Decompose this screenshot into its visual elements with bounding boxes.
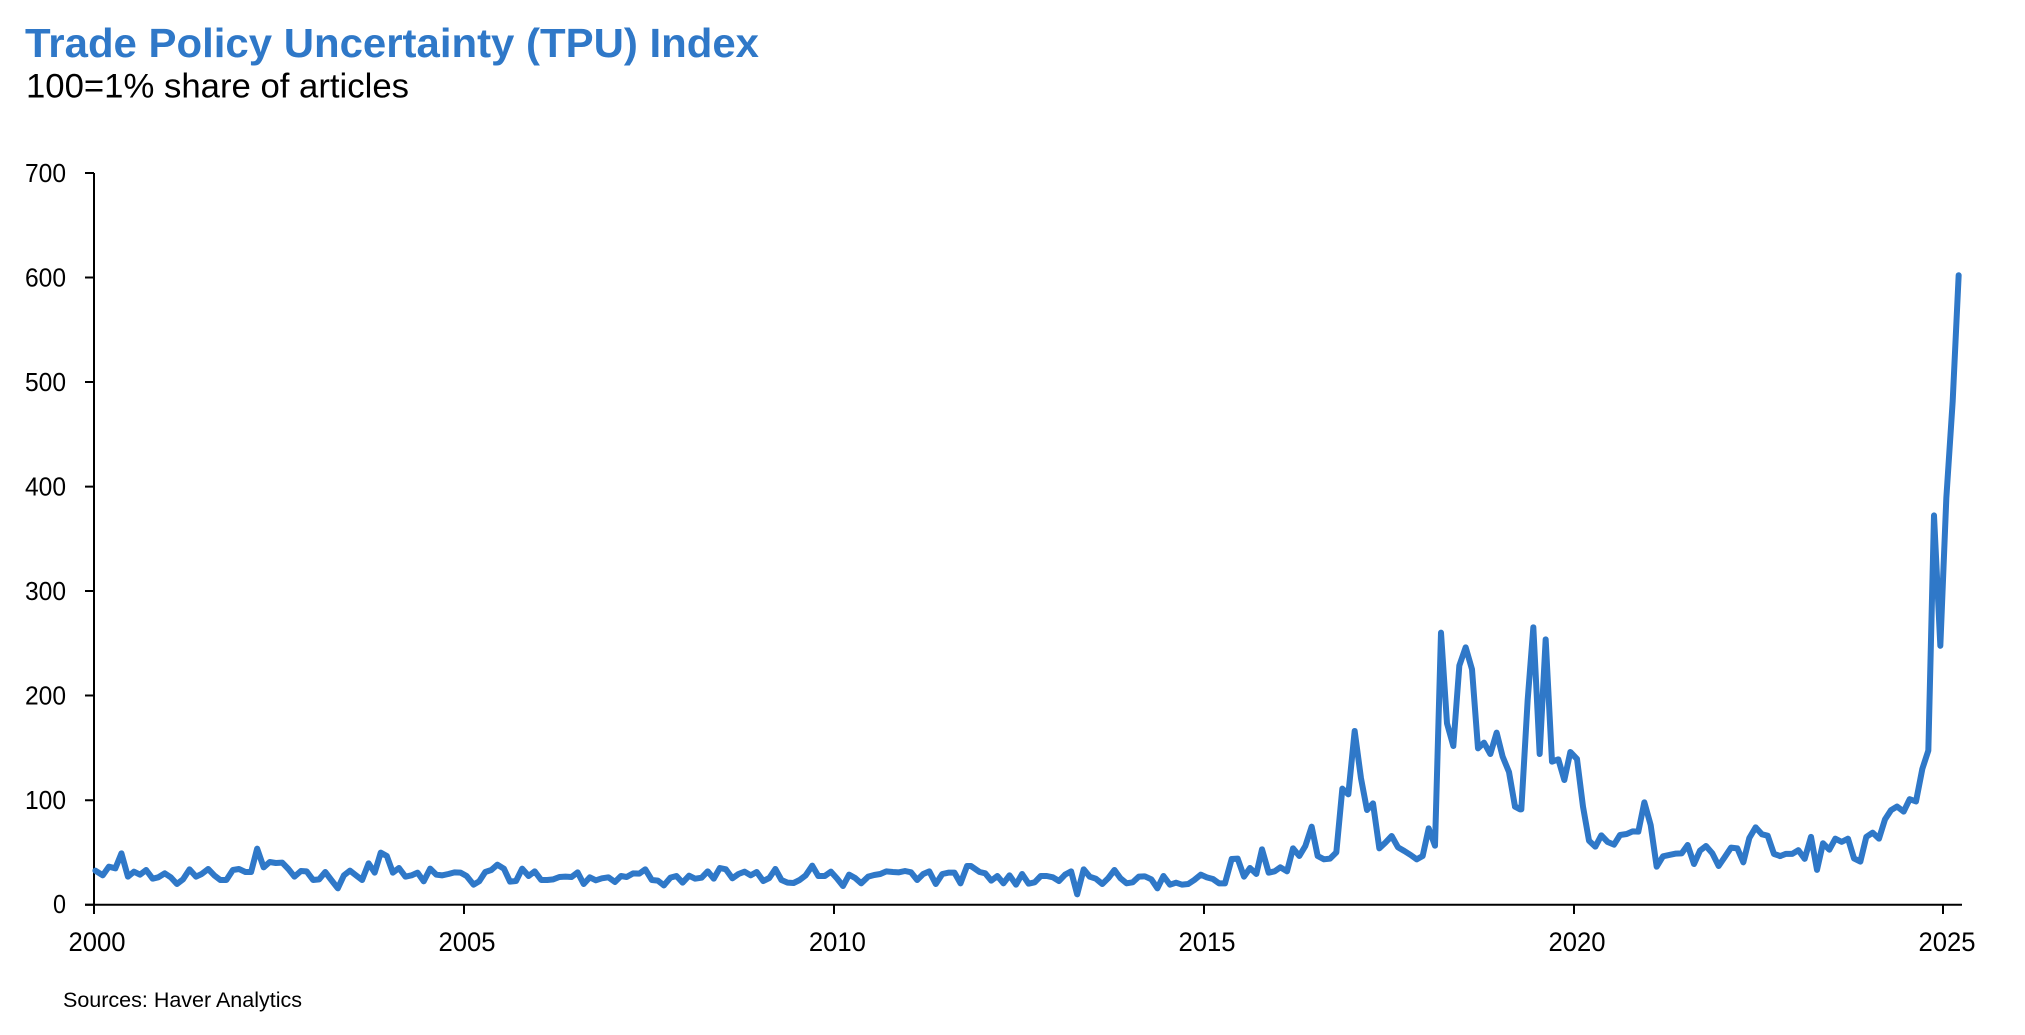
title: Trade Policy Uncertainty (TPU) Index <box>25 20 759 66</box>
y axis labels: 500 <box>25 367 66 397</box>
y axis labels: 100 <box>25 785 66 815</box>
x axis <box>68 905 1976 957</box>
y axis <box>25 158 94 919</box>
line chart: TPU index series <box>95 275 1959 894</box>
y axis labels <box>25 158 66 919</box>
y axis labels: 600 <box>25 262 66 292</box>
y axis labels: 700 <box>25 158 66 188</box>
y axis labels: 0 <box>53 889 66 919</box>
subtitle: 100=1% share of articles <box>26 68 409 106</box>
x axis labels: 2025 <box>1918 927 1976 957</box>
x axis labels: 2020 <box>1548 927 1606 957</box>
y axis labels: 200 <box>25 680 66 710</box>
x axis labels: 2015 <box>1178 927 1236 957</box>
x axis labels <box>68 927 1976 957</box>
x axis labels: 2005 <box>438 927 496 957</box>
source note: Sources: Haver Analytics <box>63 989 302 1012</box>
x axis labels: 2010 <box>809 927 866 957</box>
x axis labels: 2000 <box>68 927 126 957</box>
y axis labels: 400 <box>25 472 66 502</box>
y axis labels: 300 <box>25 576 66 606</box>
